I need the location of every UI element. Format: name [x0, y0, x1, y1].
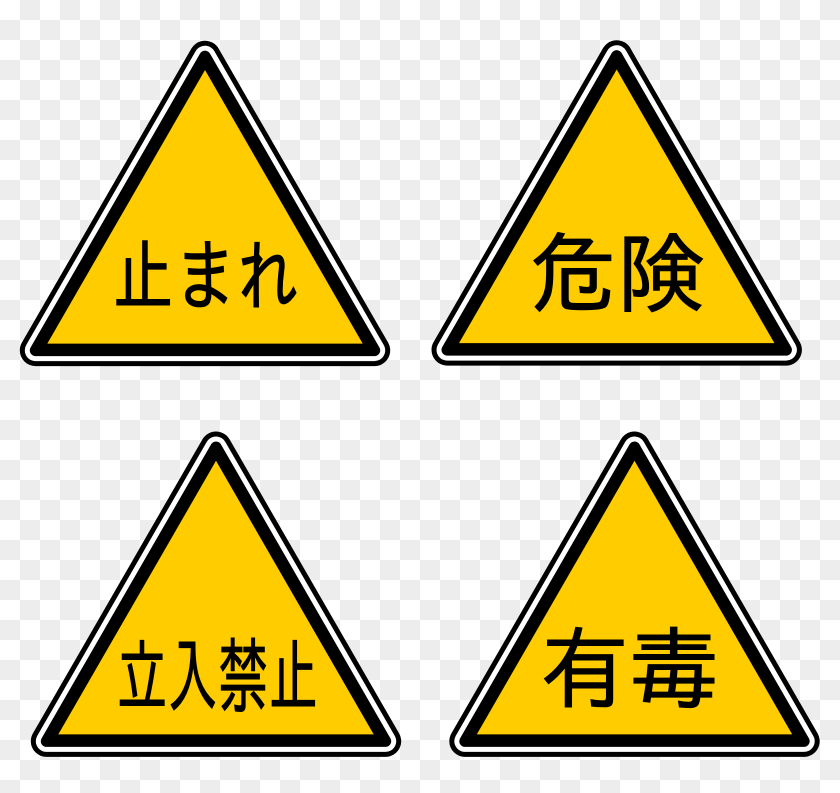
sign: stop (止まれ)	[36, 56, 374, 350]
sign text: 危険: 危険	[530, 226, 707, 324]
sign: toxic (有毒)	[465, 447, 804, 741]
sign text: 有毒: 有毒	[540, 620, 718, 720]
sign: danger (危険)	[447, 56, 786, 350]
sign text: 止まれ: 止まれ	[112, 234, 299, 323]
sign: no entry (立入禁止)	[46, 447, 386, 741]
sign text: 立入禁止: 立入禁止	[117, 632, 319, 724]
